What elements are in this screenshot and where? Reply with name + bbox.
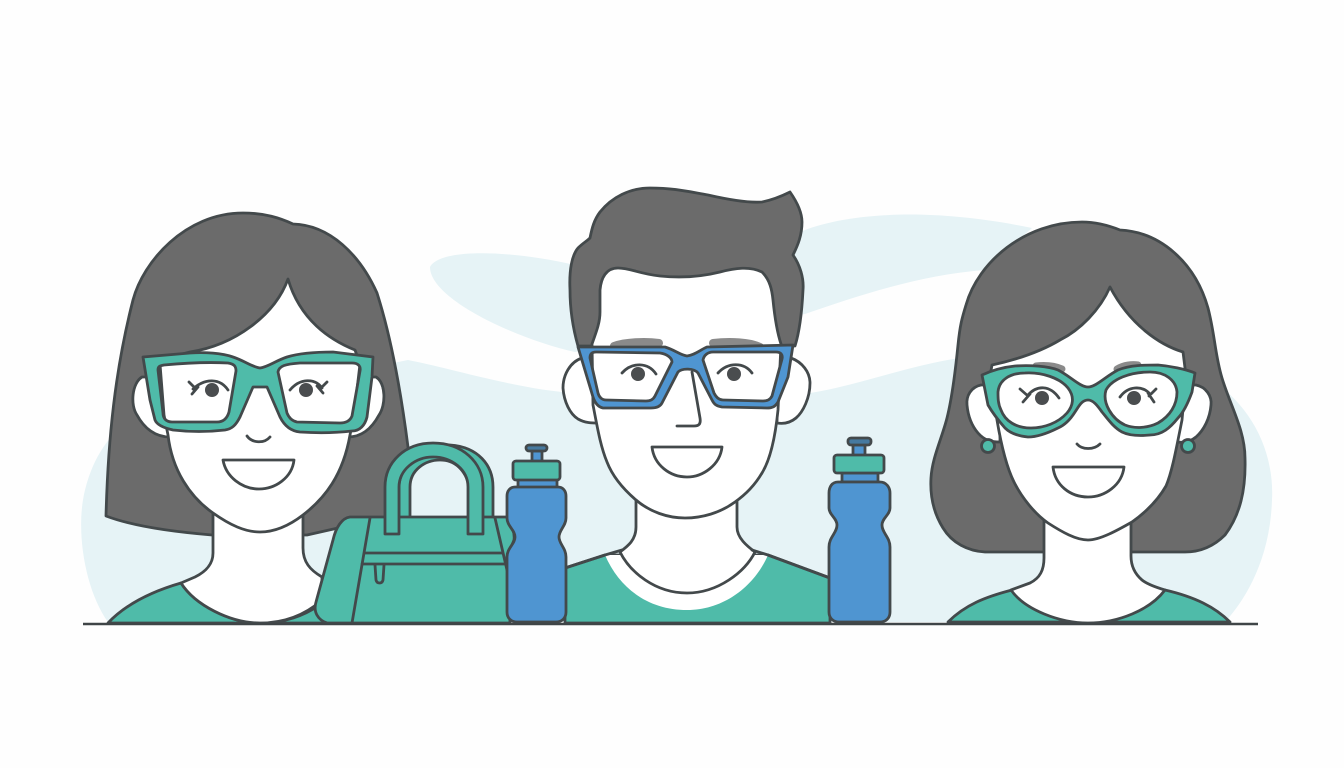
bag body [315,517,514,623]
ground line [83,623,1258,625]
person: left woman [106,213,409,623]
hair: right woman [931,222,1245,552]
eyebrows: right woman [1036,365,1138,369]
bottle body: left [507,487,566,622]
water bottle: right [829,438,890,622]
face: man [592,268,781,518]
hair: man [570,188,803,346]
eyebrows: man [614,342,760,347]
glasses: teal square frames [143,352,373,433]
shirt: man [565,555,830,623]
bottle body: right [829,482,890,622]
eyes: left woman [189,381,327,397]
bag handle: front [385,443,483,534]
bag handle: back [399,445,493,519]
shirt: right woman [948,590,1230,622]
eyes: man [622,365,752,381]
nose and mouth: man [652,372,722,477]
earrings: right woman [982,440,1194,452]
neck: right woman [1011,518,1165,623]
ears: man [563,358,810,423]
glasses: teal cat-eye frames [982,365,1195,437]
person: centre man [563,188,830,623]
face: left woman [160,279,360,532]
glasses: blue angular frames [578,345,793,408]
hair: left woman [106,213,409,535]
bottle cap: left [513,445,560,488]
bag: teal handbag [315,443,514,623]
ears: right woman [967,385,1211,442]
neck: left woman [181,510,322,623]
water bottle: left [507,445,566,622]
neck: man [620,495,755,593]
person: right woman [931,222,1245,623]
shirt: left woman [108,583,330,623]
bag seams and pocket [352,518,507,623]
background: pale blue blobs [81,215,1272,622]
shoulder lines: man [565,550,830,578]
ears: left woman [133,377,384,437]
face: right woman [990,287,1186,540]
nose and mouth: left woman [223,436,294,489]
nose and mouth: right woman [1053,444,1124,497]
collar band: man [605,555,768,610]
bottle cap: right [834,438,884,482]
eyes: right woman [1020,388,1156,405]
